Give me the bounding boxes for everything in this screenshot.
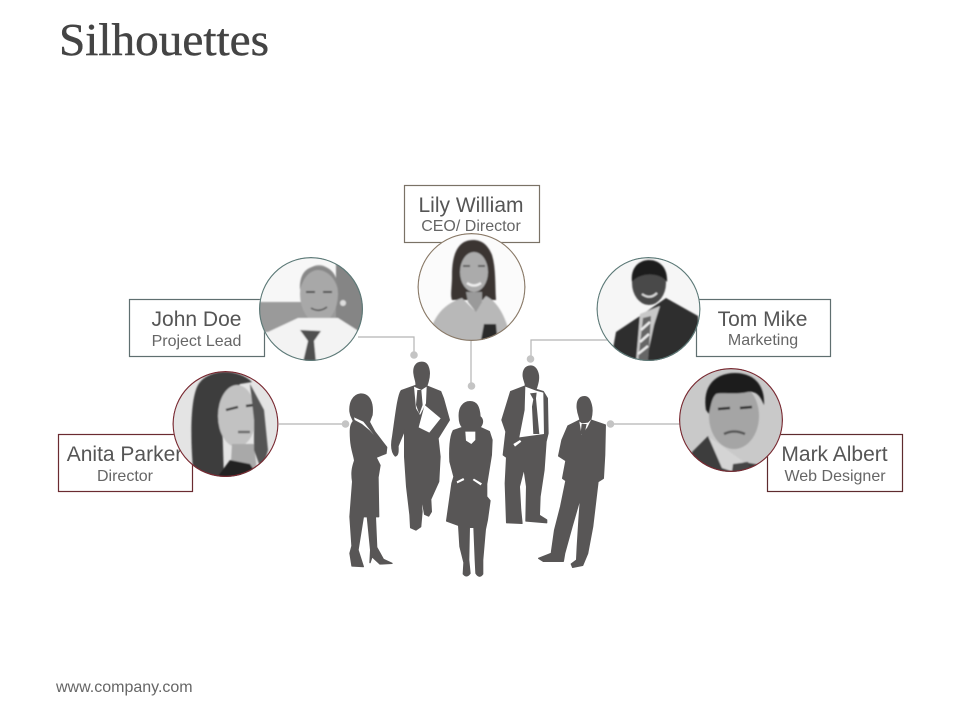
photo: Tom Mike portrait [596,257,700,365]
silhouette: man with hands in pockets [502,366,548,523]
photo: Anita Parker portrait [172,371,278,482]
card: Lily William [404,186,540,345]
name box: Marketing [728,332,798,349]
card: Mark Albert [679,368,902,492]
name box: Director [97,468,154,485]
name box: Mark Albert [781,443,888,466]
name box [58,434,192,492]
silhouette: man carrying a folder [392,362,449,530]
silhouette: woman with folded arms [350,394,392,567]
name box: Project Lead [152,333,241,350]
connector: Lily William [468,338,475,390]
name box: CEO/ Director [421,218,521,235]
card: Tom Mike [596,257,830,365]
silhouette group of five business people [350,362,605,576]
name box: Anita Parker [67,443,182,466]
name box: John Doe [152,308,241,331]
connector: Anita Parker [279,420,349,428]
silhouette: central woman with handbag [447,402,492,576]
silhouette: man with crossed arms [539,397,605,567]
connector: Tom Mike [527,340,616,363]
card: John Doe [130,256,366,365]
name box [696,300,830,356]
name box: Tom Mike [718,308,807,331]
footer url: www.company.com [55,679,193,696]
card: Anita Parker [58,371,278,492]
name box [130,300,264,356]
name box: Web Designer [784,468,886,485]
connector: John Doe [358,337,418,359]
name box [404,186,540,242]
photo: Lily William portrait [418,233,526,345]
photo: Mark Albert portrait [679,368,783,482]
connector: Mark Albert [607,420,680,428]
name box: Lily William [418,194,524,217]
name box [768,434,902,492]
title: Silhouettes [59,14,269,65]
photo: John Doe portrait [258,256,366,365]
